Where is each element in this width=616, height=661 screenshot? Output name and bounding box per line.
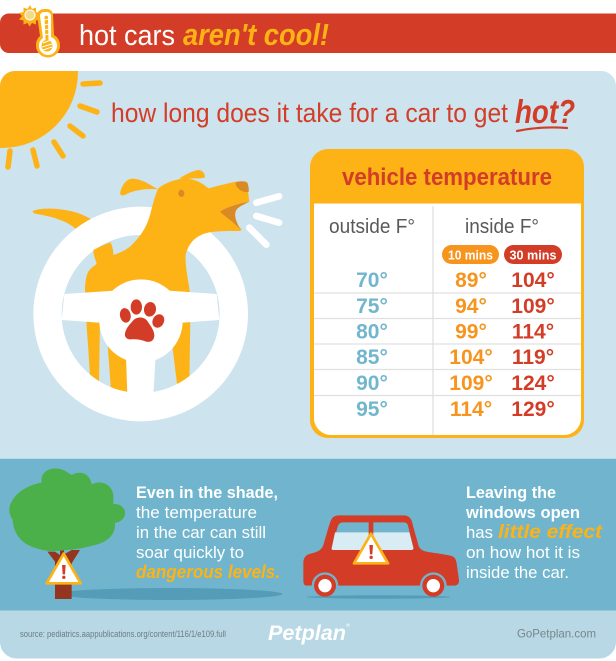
car windows [332,522,413,550]
table heading: vehicle temperature [342,164,552,191]
text: leaving the windows open [465,484,603,582]
tree shadow [58,588,282,600]
heading: how long does it take: hot? [515,93,575,130]
icon: paw print [119,299,167,342]
column headings: outside F° [329,215,415,238]
pill: 30 mins [504,245,562,264]
icon: sun [0,71,103,170]
dog body and head [85,170,249,293]
pill: 30 mins: 30 mins [510,248,557,262]
text: leaving the windows open: inside the car. [466,564,569,582]
text: even in the shade: in the car can still [136,524,266,542]
text: even in the shade: dangerous levels. [136,562,280,582]
column headings: inside F° [465,215,539,238]
panel: tips band [0,458,616,610]
title [79,17,329,52]
outside temperatures: 95° [356,398,388,421]
inside temperatures at 30 mins: 119° [512,346,554,369]
outside temperatures: 80° [356,320,388,344]
outside temperatures: 70° [356,269,388,292]
steering wheel rim [33,207,248,421]
title: hot cars [79,20,175,52]
car shadow [307,595,450,599]
text: even in the shade: soar quickly to [136,544,244,562]
logo: Petplan: Petplan [268,622,346,645]
inside temperatures at 30 mins: 129° [511,398,555,421]
illustration: tree with warning sign [9,468,282,600]
panel: main light blue background [0,71,616,458]
icon: thermometer with sun [19,5,60,58]
panel: vehicle temperature table [310,149,584,438]
heading: how long does it take: how long does it take for a car to get [111,98,509,128]
warning sign [47,554,81,583]
text: leaving the windows open: windows open [465,504,580,522]
column headings [329,215,539,238]
pill: 10 mins [442,245,499,264]
inside temperatures at 10 mins: 114° [450,398,492,421]
text: even in the shade: the temperature [136,504,257,522]
source text: source: pediatrics.aappublications.org/content/116/1/e109.full [20,629,226,640]
steering wheel spokes and hub [62,279,219,395]
text: even in the shade [136,484,280,582]
text: leaving the windows open: has [466,524,493,542]
text: even in the shade: Even in the shade, [136,484,278,502]
pill: 10 mins: 10 mins [448,248,493,262]
outside temperatures: 75° [356,295,388,318]
text: leaving the windows open: little effect [498,522,603,543]
tree foliage [9,468,125,551]
car wheels [307,572,450,599]
website: GoPetplan.com [517,626,596,640]
inside temperatures at 10 mins: 104° [449,346,493,369]
footer [0,610,616,658]
title: aren't cool! [183,17,329,52]
text: leaving the windows open: on how hot it is [466,544,580,562]
illustration: red car with warning sign [303,515,459,599]
illustration: dog in steering wheel [33,170,279,421]
inside temperatures at 10 mins [449,269,493,421]
inside temperatures at 30 mins: 114° [512,320,554,344]
inside temperatures at 30 mins: 104° [511,269,555,292]
dog tail [33,209,95,232]
inside temperatures at 30 mins [511,269,555,421]
inside temperatures at 10 mins: 99° [455,320,487,344]
warning sign [354,534,388,563]
text: leaving the windows open: Leaving the [466,484,556,502]
outside temperatures: 90° [356,372,388,395]
bark lines [249,196,279,245]
inside temperatures at 30 mins: 124° [511,372,555,395]
inside temperatures at 10 mins: 89° [455,269,487,292]
outside temperatures: 85° [356,346,388,369]
outside temperatures [356,269,388,421]
inside temperatures at 10 mins: 109° [449,372,493,395]
inside temperatures at 30 mins: 109° [511,295,555,318]
car body [303,515,459,586]
header banner [0,5,616,58]
tree trunk [47,545,80,599]
inside temperatures at 10 mins: 94° [455,295,487,318]
dog legs [86,317,190,400]
